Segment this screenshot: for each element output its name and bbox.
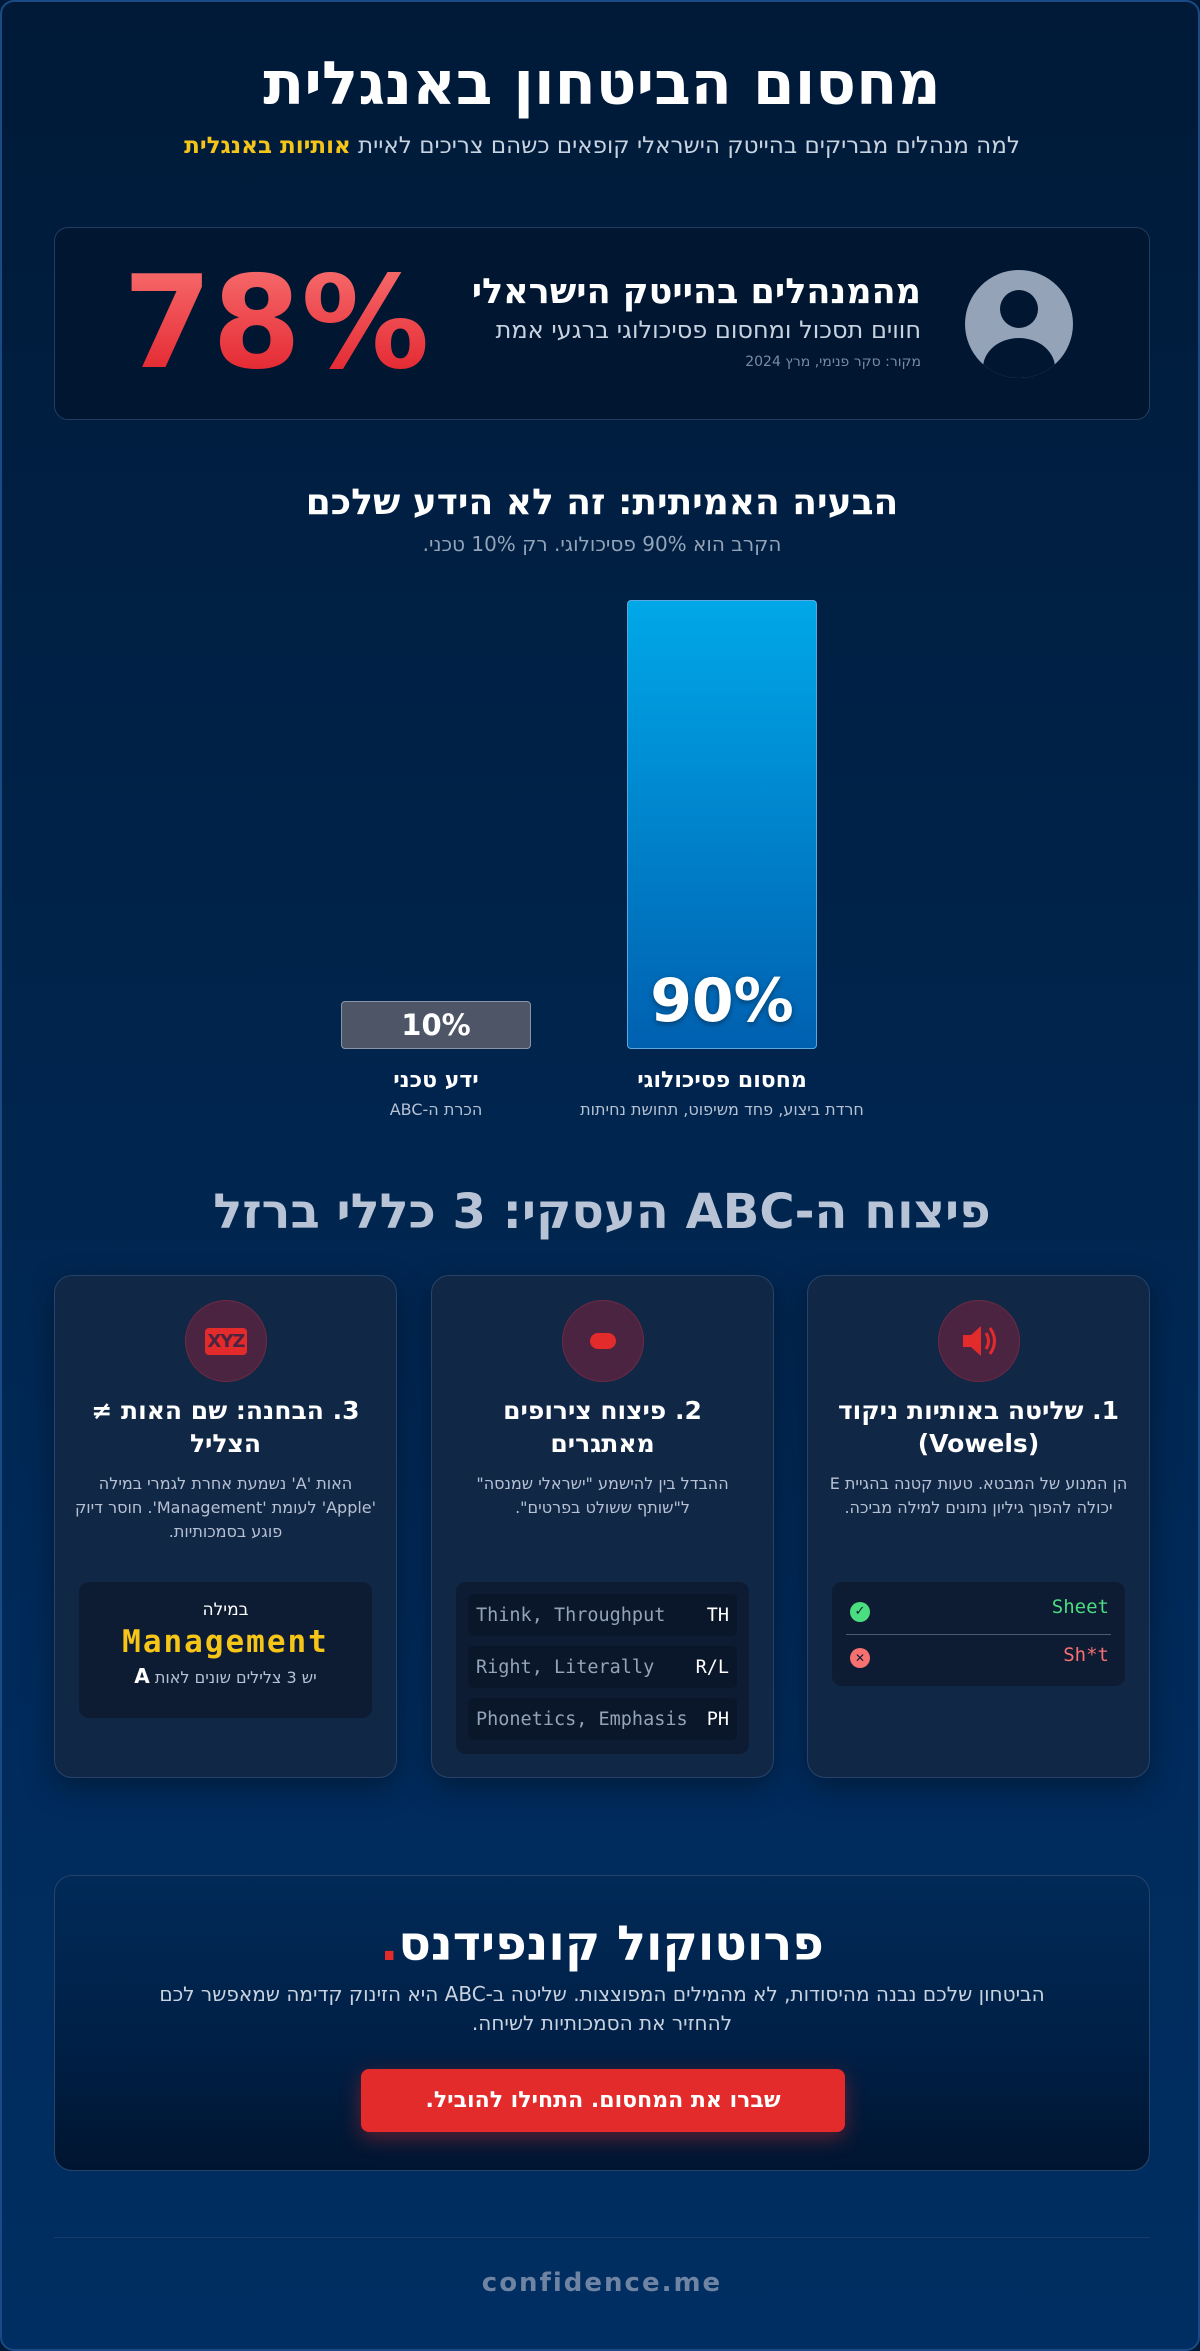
example box: Management: [122, 1624, 329, 1660]
icon: speaker: [938, 1300, 1020, 1382]
example box: [79, 1582, 372, 1718]
example box: [832, 1582, 1125, 1686]
example list: TH: [707, 1604, 729, 1626]
bar: 10% technical: [341, 1001, 531, 1049]
stat description: חווים תסכול ומחסום פסיכולוגי ברגעי אמת: [496, 316, 921, 344]
heading: 3 iron rules: פיצוח ה-ABC העסקי: 3 כללי ברזל: [213, 1184, 991, 1240]
panel: CTA: [54, 1875, 1150, 2171]
bar: 90% psychological: [627, 600, 817, 1049]
example list: Phonetics, Emphasis: [476, 1708, 688, 1730]
example box: Sh*t: [1063, 1644, 1109, 1666]
CTA button: שברו את המחסום. התחילו להוביל.: [425, 2088, 781, 2113]
bar chart: חרדת ביצוע, פחד משיפוט, תחושת נחיתות: [580, 1100, 864, 1119]
big number 78%: 78%: [123, 249, 429, 398]
bar: 90% psychological: 90%: [650, 966, 794, 1036]
source: מקור: סקר פנימי, מרץ 2024: [745, 354, 921, 370]
example box: יש 3 צלילים שונים לאות A: [134, 1664, 317, 1688]
example list: PH: [707, 1708, 729, 1730]
bar chart: הכרת ה-ABC: [390, 1100, 482, 1119]
panel: rule 1 vowels: [807, 1275, 1150, 1778]
example list: Right, Literally: [476, 1656, 654, 1678]
panel: rule 2 combinations: ההבדל בין להישמע "ישראלי שמנסה" ל"שותף ששולט בפרטים".: [476, 1474, 729, 1517]
CTA title: פרוטוקול קונפידנס.: [380, 1916, 824, 1972]
CTA button: [361, 2069, 845, 2132]
bar: 10% technical: 10%: [401, 1008, 471, 1042]
icon: XYZ: XYZ: [208, 1330, 244, 1352]
example list: Think, Throughput: [476, 1604, 665, 1626]
example box: ✕: [855, 1651, 865, 1665]
panel: rule 3 letter name: האות 'A' נשמעת אחרת לגמרי במילה 'Apple' לעומת 'Management'. חוסר דיוק פוגע בסמכותיות.: [75, 1474, 376, 1541]
label: technical: ידע טכני: [393, 1068, 479, 1093]
subheading: הקרב הוא 90% פסיכולוגי. רק 10% טכני.: [423, 532, 781, 556]
panel: rule 3 letter name: [54, 1275, 397, 1778]
panel: rule 1 vowels: הן המנוע של המבטא. טעות קטנה בהגיית E יכולה להפוך גיליון נתונים למילה מביכה.: [830, 1474, 1127, 1517]
footer: confidence.me: [482, 2268, 722, 2298]
panel: stat card: [54, 227, 1150, 420]
panel: rule 2 combinations: 2. פיצוח צירופים מאתגרים: [503, 1396, 702, 1458]
label: psychological: מחסום פסיכולוגי: [637, 1068, 807, 1093]
example list: [456, 1582, 749, 1754]
title: מחסום הביטחון באנגלית: [263, 49, 941, 119]
panel: rule 3 letter name: 3. הבחנה: שם האות ≠ הצליל: [91, 1396, 360, 1458]
icon: XYZ: [185, 1300, 267, 1382]
icon: user avatar: [965, 270, 1073, 378]
example box: במילה: [203, 1600, 248, 1620]
subtitle: למה מנהלים מבריקים בהייטק הישראלי קופאים כשהם צריכים לאיית אותיות באנגלית: [184, 133, 1020, 159]
icon: red badge: [562, 1300, 644, 1382]
stat heading: מהמנהלים בהייטק הישראלי: [472, 272, 921, 312]
example box: ✓: [855, 1604, 865, 1619]
panel: rule 1 vowels: 1. שליטה באותיות ניקוד (Vowels): [838, 1396, 1119, 1458]
example list: R/L: [696, 1656, 729, 1678]
bar chart: [341, 600, 864, 1119]
CTA text: הביטחון שלכם נבנה מהיסודות, לא מהמילים המפוצצות. שליטה ב-ABC היא הזינוק קדימה שמאפשר לכם להחזיר את הסמכותיות לשיחה.: [159, 1982, 1045, 2035]
heading: real problem: הבעיה האמיתית: זה לא הידע שלכם: [306, 482, 898, 523]
example box: Sheet: [1052, 1596, 1109, 1618]
panel: rule 2 combinations: [431, 1275, 774, 1778]
